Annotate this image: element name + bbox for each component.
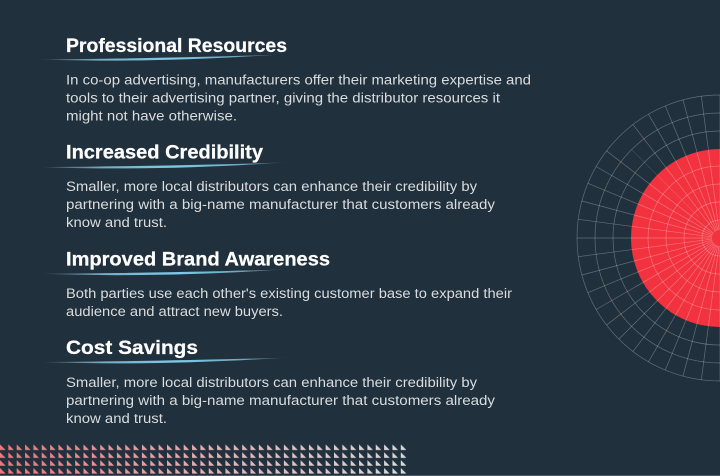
heading: Cost Savings: Cost Savings (66, 337, 198, 359)
brush underline (43, 269, 286, 275)
body text (66, 286, 513, 319)
section: Cost Savings (43, 337, 495, 426)
radial grid graphic with red half circle (577, 95, 720, 381)
bottom edge line (0, 475, 720, 476)
body text: Both parties use each other's existing customer base to expand their (66, 286, 513, 301)
body text: partnering with a big-name manufacturer that customers already (66, 393, 495, 408)
heading: Improved Brand Awareness: Improved Brand Awareness (66, 249, 330, 271)
body text: Smaller, more local distributors can enhance their credibility by (66, 375, 477, 390)
radial spokes (577, 95, 720, 381)
concentric rings (577, 95, 720, 381)
body text: tools to their advertising partner, giving the distributor resources it (66, 90, 500, 105)
body text: partnering with a big-name manufacturer that customers already (66, 197, 495, 212)
brush underline (43, 358, 288, 363)
section: Improved Brand Awareness (43, 249, 513, 319)
heading: Increased Credibility: Increased Credibility (66, 142, 263, 164)
section: Increased Credibility (43, 142, 495, 230)
body text: know and trust. (66, 215, 167, 230)
body text (66, 179, 495, 230)
body text: know and trust. (66, 411, 167, 426)
body text: Smaller, more local distributors can enhance their credibility by (66, 179, 477, 194)
heading: Professional Resources: Professional Resources (66, 35, 287, 57)
section: Professional Resources (40, 35, 531, 123)
red half circle (631, 149, 720, 327)
body text: In co-op advertising, manufacturers offer their marketing expertise and (66, 72, 531, 87)
brush underline (43, 162, 286, 168)
triangle pattern strip (0, 444, 406, 475)
body text (66, 72, 531, 123)
body text (66, 375, 495, 426)
body text: might not have otherwise. (66, 108, 237, 123)
brush underline (40, 55, 279, 61)
body text: audience and attract new buyers. (66, 304, 283, 319)
